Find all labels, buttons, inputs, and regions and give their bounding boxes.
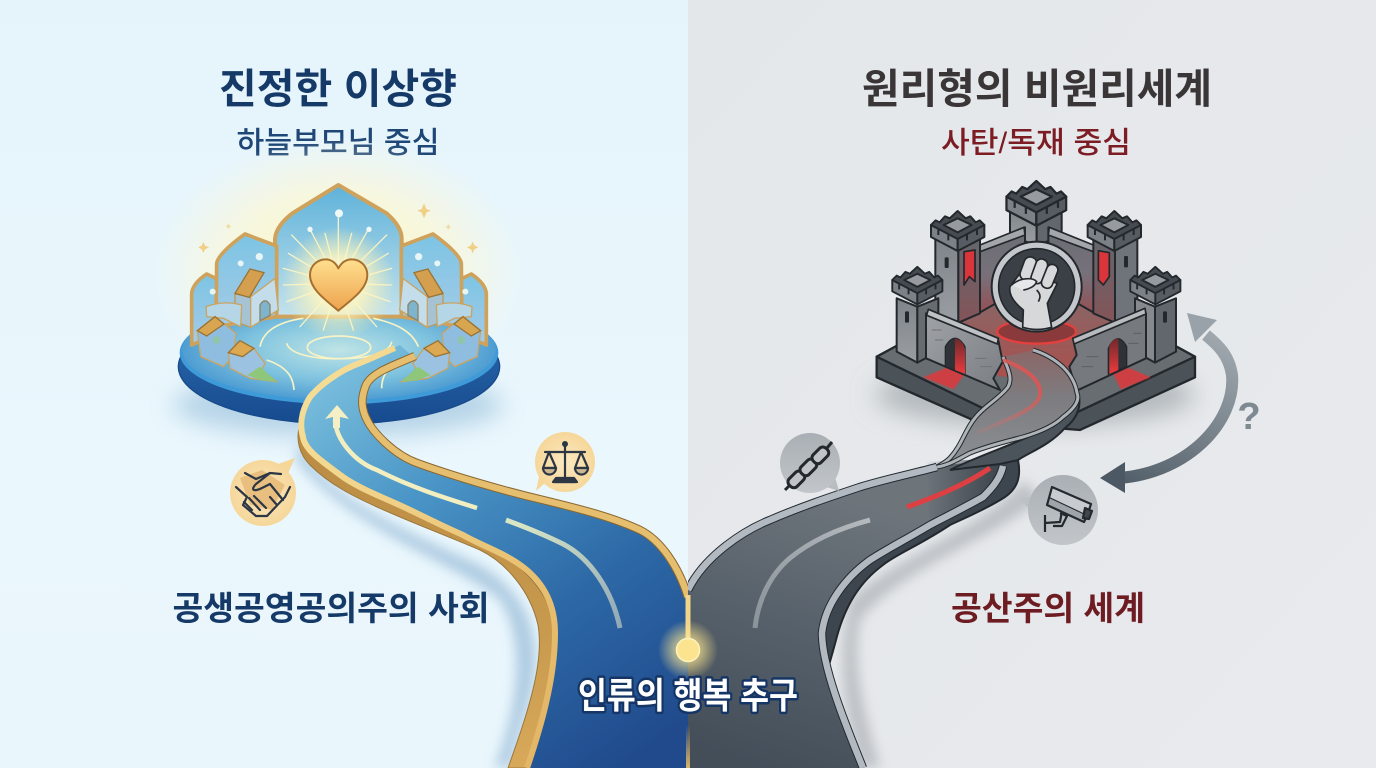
- icon: justice scales bubble: [535, 432, 595, 492]
- arrow on the road: [325, 405, 349, 428]
- label: pursuit of human happiness: 인류의 행복 추구: [578, 675, 798, 716]
- lane line and dashes: [335, 420, 620, 628]
- courtyard rings: [260, 318, 418, 390]
- fist medallion: [992, 242, 1082, 332]
- back walls: [978, 227, 1025, 313]
- red light from the gates: [923, 367, 967, 389]
- back right tower: [1093, 237, 1115, 323]
- subtitle: heavenly parent centred: 하늘부모님 중심: [236, 127, 440, 160]
- title: unprincipled world: 원리형의 비원리세계: [862, 66, 1212, 112]
- illustration: utopian village on a disc: [153, 137, 523, 437]
- arrow: two-way curved arrow beside the fortress: [1100, 313, 1232, 493]
- label: mutual prosperity society: 공생공영공의주의 사회: [172, 591, 490, 628]
- heading: left title block: [219, 66, 457, 160]
- road: left blue road with gold edge: [298, 345, 688, 768]
- back left tower: [935, 237, 958, 323]
- origin point where both roads split: [658, 595, 718, 768]
- left road: shadow: [296, 440, 536, 768]
- red lane lines and silver dash: [907, 468, 990, 507]
- icon: surveillance camera bubble: [1020, 475, 1098, 545]
- floor glow under the fist: [997, 320, 1076, 344]
- centre back tower: [1010, 207, 1037, 245]
- panel: right background: [688, 0, 1376, 768]
- right road: shadow: [843, 480, 1040, 768]
- road: right grey road twisting into the fortress: [688, 350, 1079, 768]
- label: communist world: 공산주의 세계: [951, 591, 1145, 628]
- front left wall: [926, 313, 1003, 390]
- central gate: [275, 185, 402, 317]
- icon: handshake bubble: [230, 458, 296, 526]
- title: true utopia: 진정한 이상향: [219, 66, 457, 112]
- front left tower: [897, 298, 917, 363]
- question mark: ?: [1237, 396, 1261, 438]
- sparkles: [198, 203, 478, 253]
- front right tower: [1135, 298, 1155, 363]
- front right wall: [1069, 313, 1146, 391]
- heading: right title block: [862, 66, 1212, 160]
- upper road twist: [950, 393, 1079, 470]
- subtitle: satan and dictatorship centred: 사탄/독재 중심: [941, 127, 1131, 160]
- fortress base: [877, 357, 1195, 430]
- panel: left background: [0, 0, 688, 768]
- heart: [310, 259, 367, 311]
- illustration: fortress of dictatorship: [875, 181, 1195, 430]
- icon: chain bubble: [780, 433, 840, 493]
